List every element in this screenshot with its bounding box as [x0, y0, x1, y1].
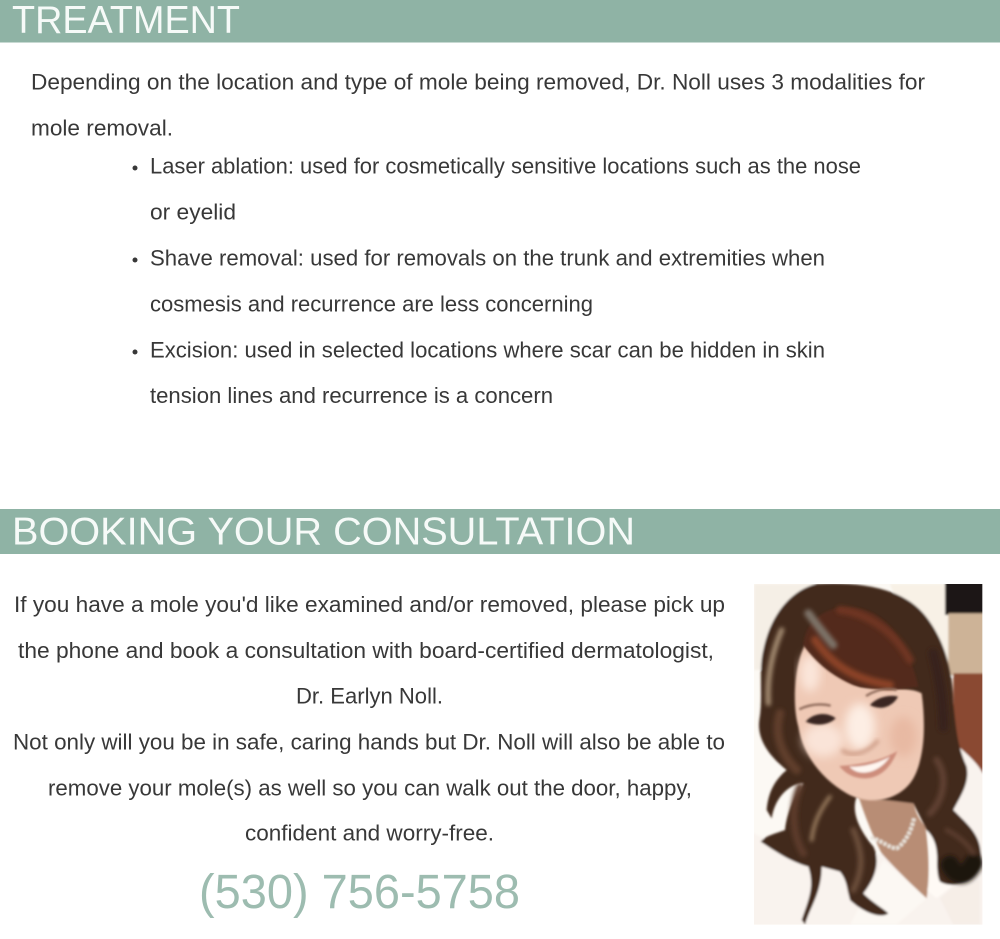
bullet: shave removal: Shave removal: used for removals on the trunk and extremities when	[150, 246, 825, 270]
booking invitation text: the phone and book a consultation with board-certified dermatologist,	[18, 638, 714, 663]
booking invitation text	[14, 592, 725, 708]
eyes and brows	[799, 689, 898, 725]
bullet: shave removal	[132, 246, 825, 316]
panel: booking your consultation	[0, 509, 1000, 930]
bullet: shave removal: cosmesis and recurrence are less concerning	[150, 292, 593, 316]
bullet: excision	[132, 338, 825, 408]
treatment intro text: Depending on the location and type of mole being removed, Dr. Noll uses 3 modalities for	[31, 70, 925, 94]
booking invitation text: If you have a mole you'd like examined and/or removed, please pick up	[14, 592, 725, 617]
nose shadow	[842, 740, 878, 754]
booking reassurance text: remove your mole(s) as well so you can walk out the door, happy,	[48, 776, 692, 800]
neck and chest	[857, 790, 929, 898]
photo: Dr. Earlyn Noll portrait	[750, 580, 987, 930]
bullet: laser ablation: or eyelid	[150, 200, 236, 224]
bangs	[803, 607, 918, 689]
smile	[839, 751, 897, 778]
jacket	[750, 745, 987, 930]
bullet: excision: Excision: used in selected locations where scar can be hidden in skin	[150, 338, 825, 362]
treatment heading bar: TREATMENT	[12, 0, 240, 42]
treatment intro text: mole removal.	[31, 116, 173, 140]
booking heading bar	[0, 509, 1000, 554]
booking reassurance text: confident and worry-free.	[245, 820, 494, 846]
necklace	[871, 818, 914, 848]
bullet: excision: tension lines and recurrence is a concern	[150, 383, 553, 408]
booking reassurance text: Not only will you be in safe, caring hands but Dr. Noll will also be able to	[13, 730, 725, 754]
panel: treatment	[0, 0, 1000, 408]
booking invitation text: Dr. Earlyn Noll.	[296, 684, 443, 708]
face	[795, 645, 924, 800]
booking reassurance text	[13, 730, 725, 846]
treatment heading bar	[0, 0, 1000, 42]
hair highlights	[768, 630, 973, 890]
bullet: laser ablation	[132, 154, 861, 224]
phone number: (530) 756-5758	[199, 866, 520, 919]
treatment intro text	[31, 70, 925, 140]
booking heading bar: BOOKING YOUR CONSULTATION	[12, 510, 635, 554]
hair	[759, 583, 981, 925]
bullet: laser ablation: Laser ablation: used for cosmetically sensitive locations such as the nose	[150, 154, 861, 178]
